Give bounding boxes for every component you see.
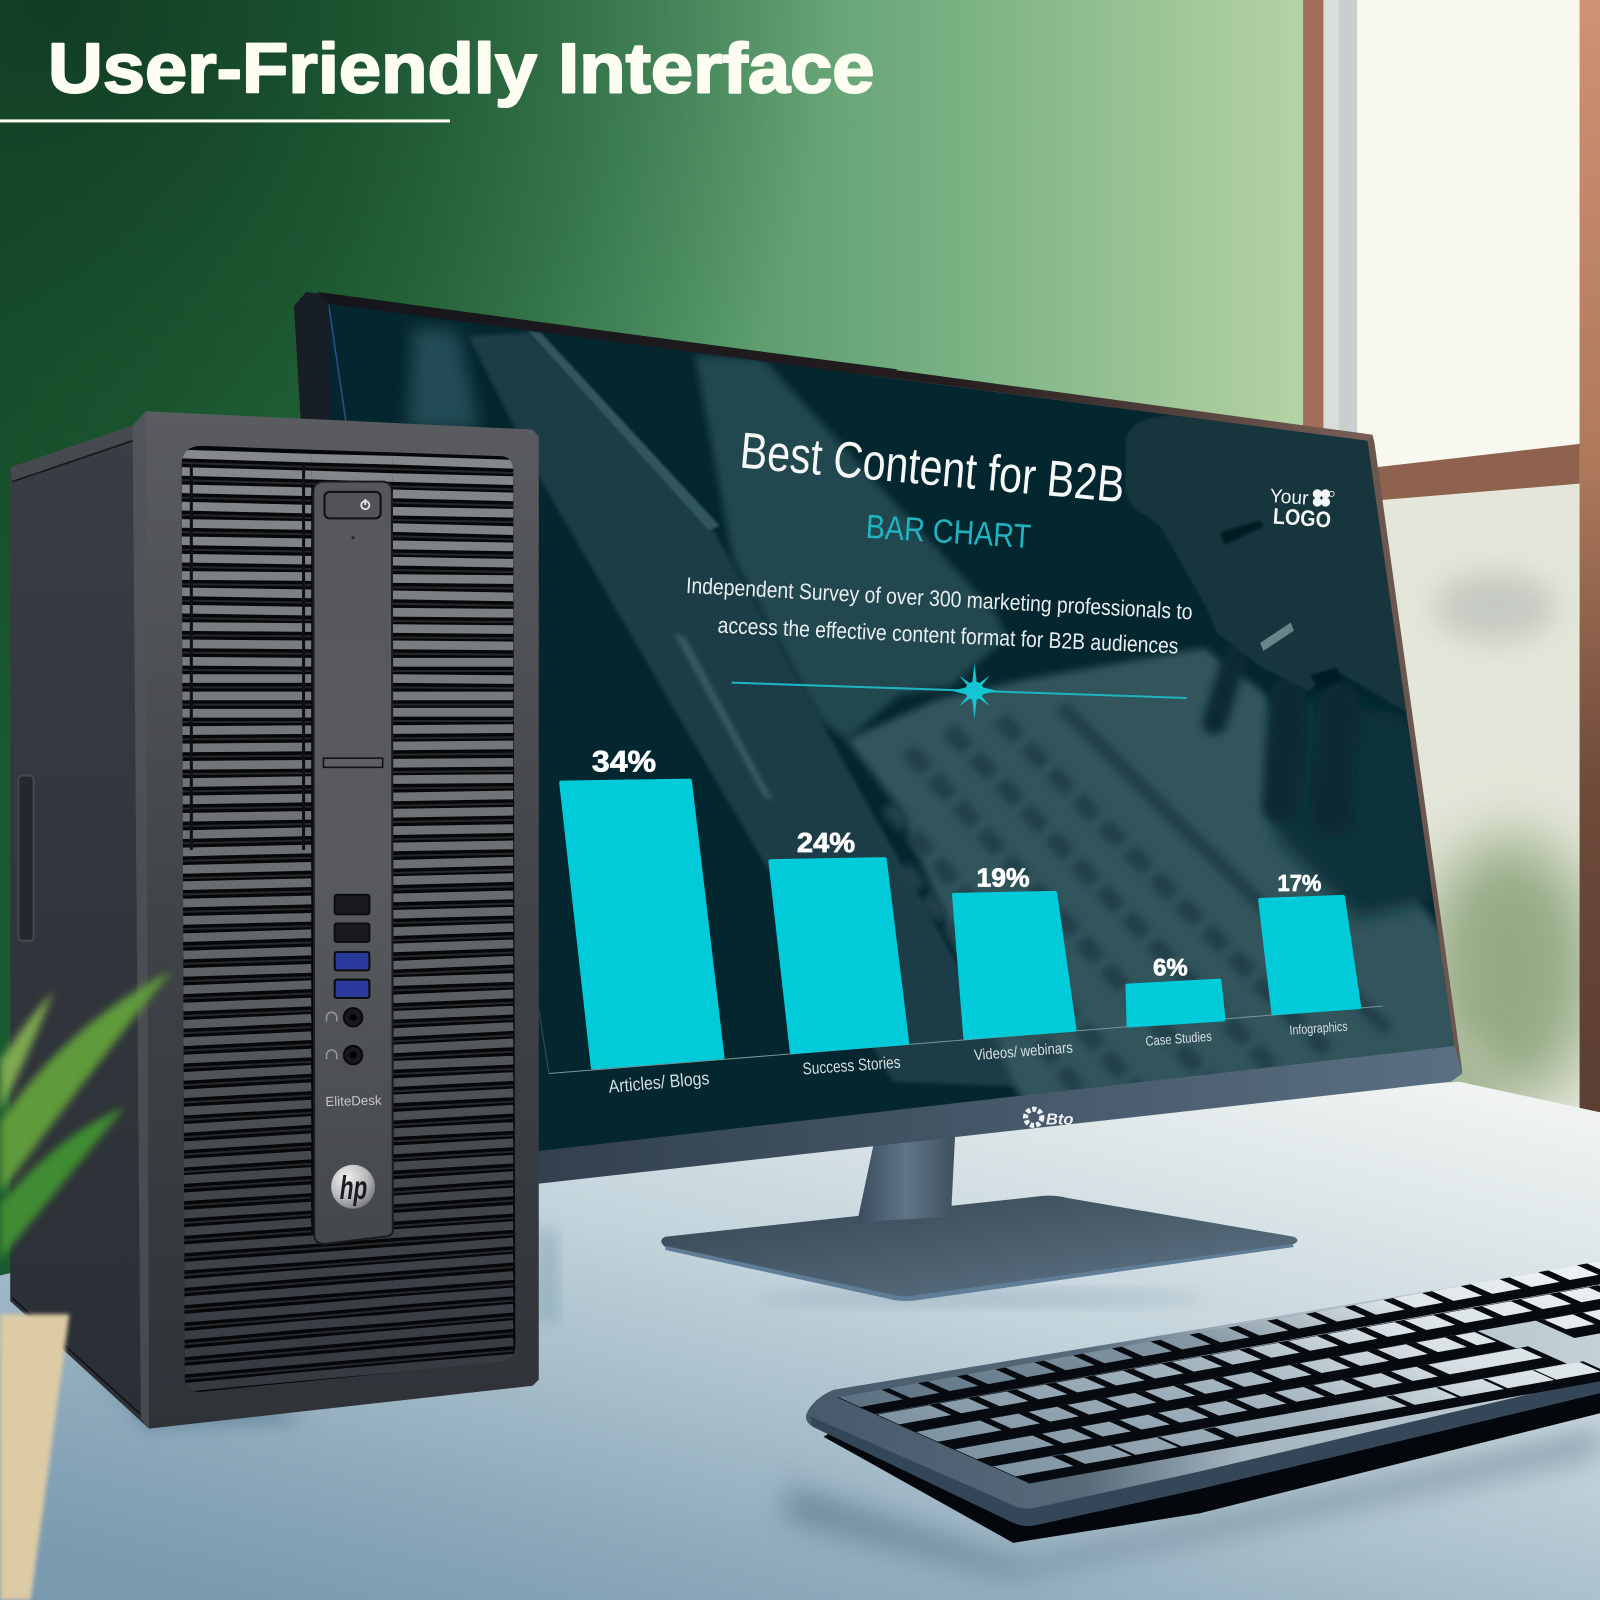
monitor stand [661,1135,1298,1306]
model name: EliteDesk [325,1093,382,1109]
monitor chin [347,1044,1462,1194]
category labels: Success Stories [802,1053,901,1078]
leaves [0,971,171,1260]
category labels: Case Studies [1145,1029,1212,1049]
plant and pot [0,971,171,1600]
key shadows [856,1263,1600,1475]
key tops: main rows [888,1278,1600,1472]
keyboard body [806,1263,1600,1526]
brand on chin [1026,1109,1073,1128]
side latch [18,776,34,941]
screen background photo: laptop and hand [408,327,1459,1122]
tower side panel [10,411,149,1429]
survey description: Independent Survey of over 300 marketing professionals to [685,573,1193,624]
keys [848,1260,1600,1475]
power button [324,492,381,518]
logo: Your [1269,485,1310,510]
value labels: 17% [1278,870,1322,896]
pot [0,1314,69,1600]
hp logo [331,1165,375,1209]
chart heading: Best Content for B2B [738,422,1127,513]
keyboard front lip [810,1378,1600,1526]
title: User-Friendly Interface [48,28,874,107]
bar: success stories [770,859,907,1052]
ventilation grille [182,446,515,1397]
desktop tower [10,411,557,1429]
category labels: Videos/ webinars [973,1039,1074,1064]
category labels: Articles/ Blogs [608,1067,710,1097]
bar: case studies [1128,981,1223,1026]
control panel [313,482,393,1244]
survey description [688,578,1192,654]
tower front frame [133,411,539,1429]
audio jacks [327,1008,362,1064]
title underline [0,119,450,122]
value labels: 24% [797,827,855,858]
key tops: far row [849,1261,1600,1402]
value labels: 19% [977,865,1030,893]
stand base [661,1196,1298,1297]
monitor bezel [294,292,1462,1194]
screen [306,286,1480,1184]
category labels: Infographics [1289,1019,1348,1038]
value labels: 34% [592,745,656,778]
keyboard shadow [786,1429,1600,1577]
value labels [592,745,1322,982]
logo [1270,488,1335,528]
keyboard underside [823,1367,1600,1543]
category labels [608,1019,1348,1097]
survey description: access the effective content format for B2B audiences [717,613,1179,659]
bar: infographics [1260,897,1359,1013]
logo: LOGO [1272,504,1332,533]
bar chart [539,745,1383,1097]
USB ports [335,895,369,998]
window frame and glass [1303,0,1600,1133]
brand on chin: Bto [1046,1111,1073,1128]
bar: videos [954,893,1074,1038]
hp logo: hp [340,1170,367,1207]
card slot [323,758,383,767]
keyboard [786,1260,1600,1577]
chart subtitle: BAR CHART [865,509,1032,556]
divider with star [732,663,1187,719]
stand neck [857,1135,955,1222]
desk surface [0,1082,1600,1600]
bar: articles [561,781,722,1067]
lower fingers [1214,653,1339,816]
value labels: 6% [1153,955,1188,982]
axis [549,1006,1383,1073]
hand [1125,415,1413,716]
monitor [294,286,1480,1194]
